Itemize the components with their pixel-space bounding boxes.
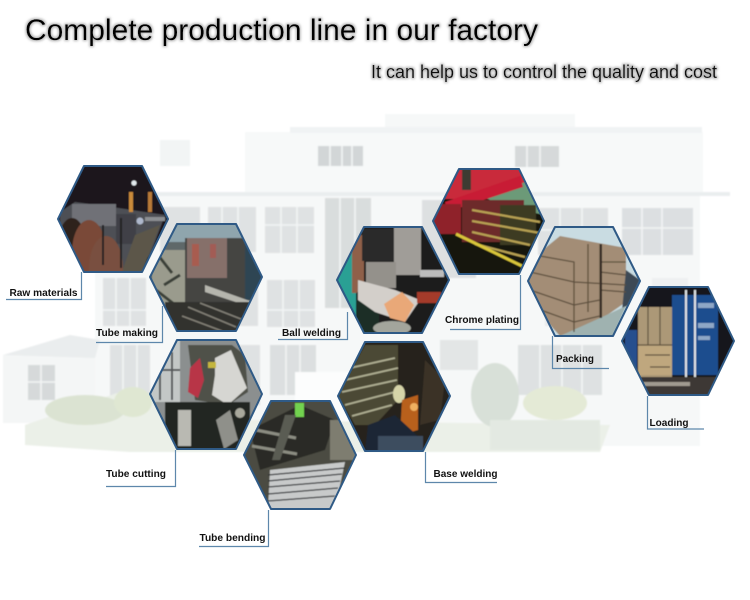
- hexagon photo: tube bending: [244, 401, 356, 509]
- title: Complete production line in our factory: [25, 14, 538, 47]
- hexagon photo: tube cutting: [150, 340, 262, 449]
- label: tube bending: Tube bending: [200, 532, 266, 544]
- subtitle: It can help us to control the quality and cost: [371, 61, 717, 82]
- hexagon photo: packing: [528, 227, 640, 336]
- faded factory building background: [3, 114, 730, 452]
- label: ball welding: Ball welding: [282, 327, 341, 339]
- label: base welding: [426, 452, 498, 482]
- label: tube cutting: Tube cutting: [106, 468, 166, 480]
- label: tube cutting: [106, 450, 176, 486]
- label: packing: [552, 336, 609, 368]
- hexagon photo: tube making: [150, 224, 263, 332]
- label: base welding: Base welding: [434, 468, 498, 480]
- label: tube making: Tube making: [96, 327, 158, 339]
- label: raw materials: Raw materials: [10, 287, 78, 299]
- label: loading: Loading: [650, 417, 688, 429]
- hexagon photo: base welding: [338, 342, 450, 451]
- label: chrome plating: Chrome plating: [445, 314, 519, 326]
- label: chrome plating: [445, 275, 520, 330]
- label: packing: Packing: [556, 353, 594, 365]
- label: tube making: [96, 306, 162, 342]
- hexagon photo: loading: [622, 287, 734, 395]
- label: loading: [648, 396, 704, 429]
- hexagon photo: chrome plating: [433, 168, 544, 274]
- hexagon photo: raw materials: [57, 165, 169, 273]
- hexagon photo: ball welding: [337, 227, 449, 335]
- label: ball welding: [278, 312, 348, 340]
- label: tube bending: [199, 510, 268, 546]
- label: raw materials: [6, 272, 82, 300]
